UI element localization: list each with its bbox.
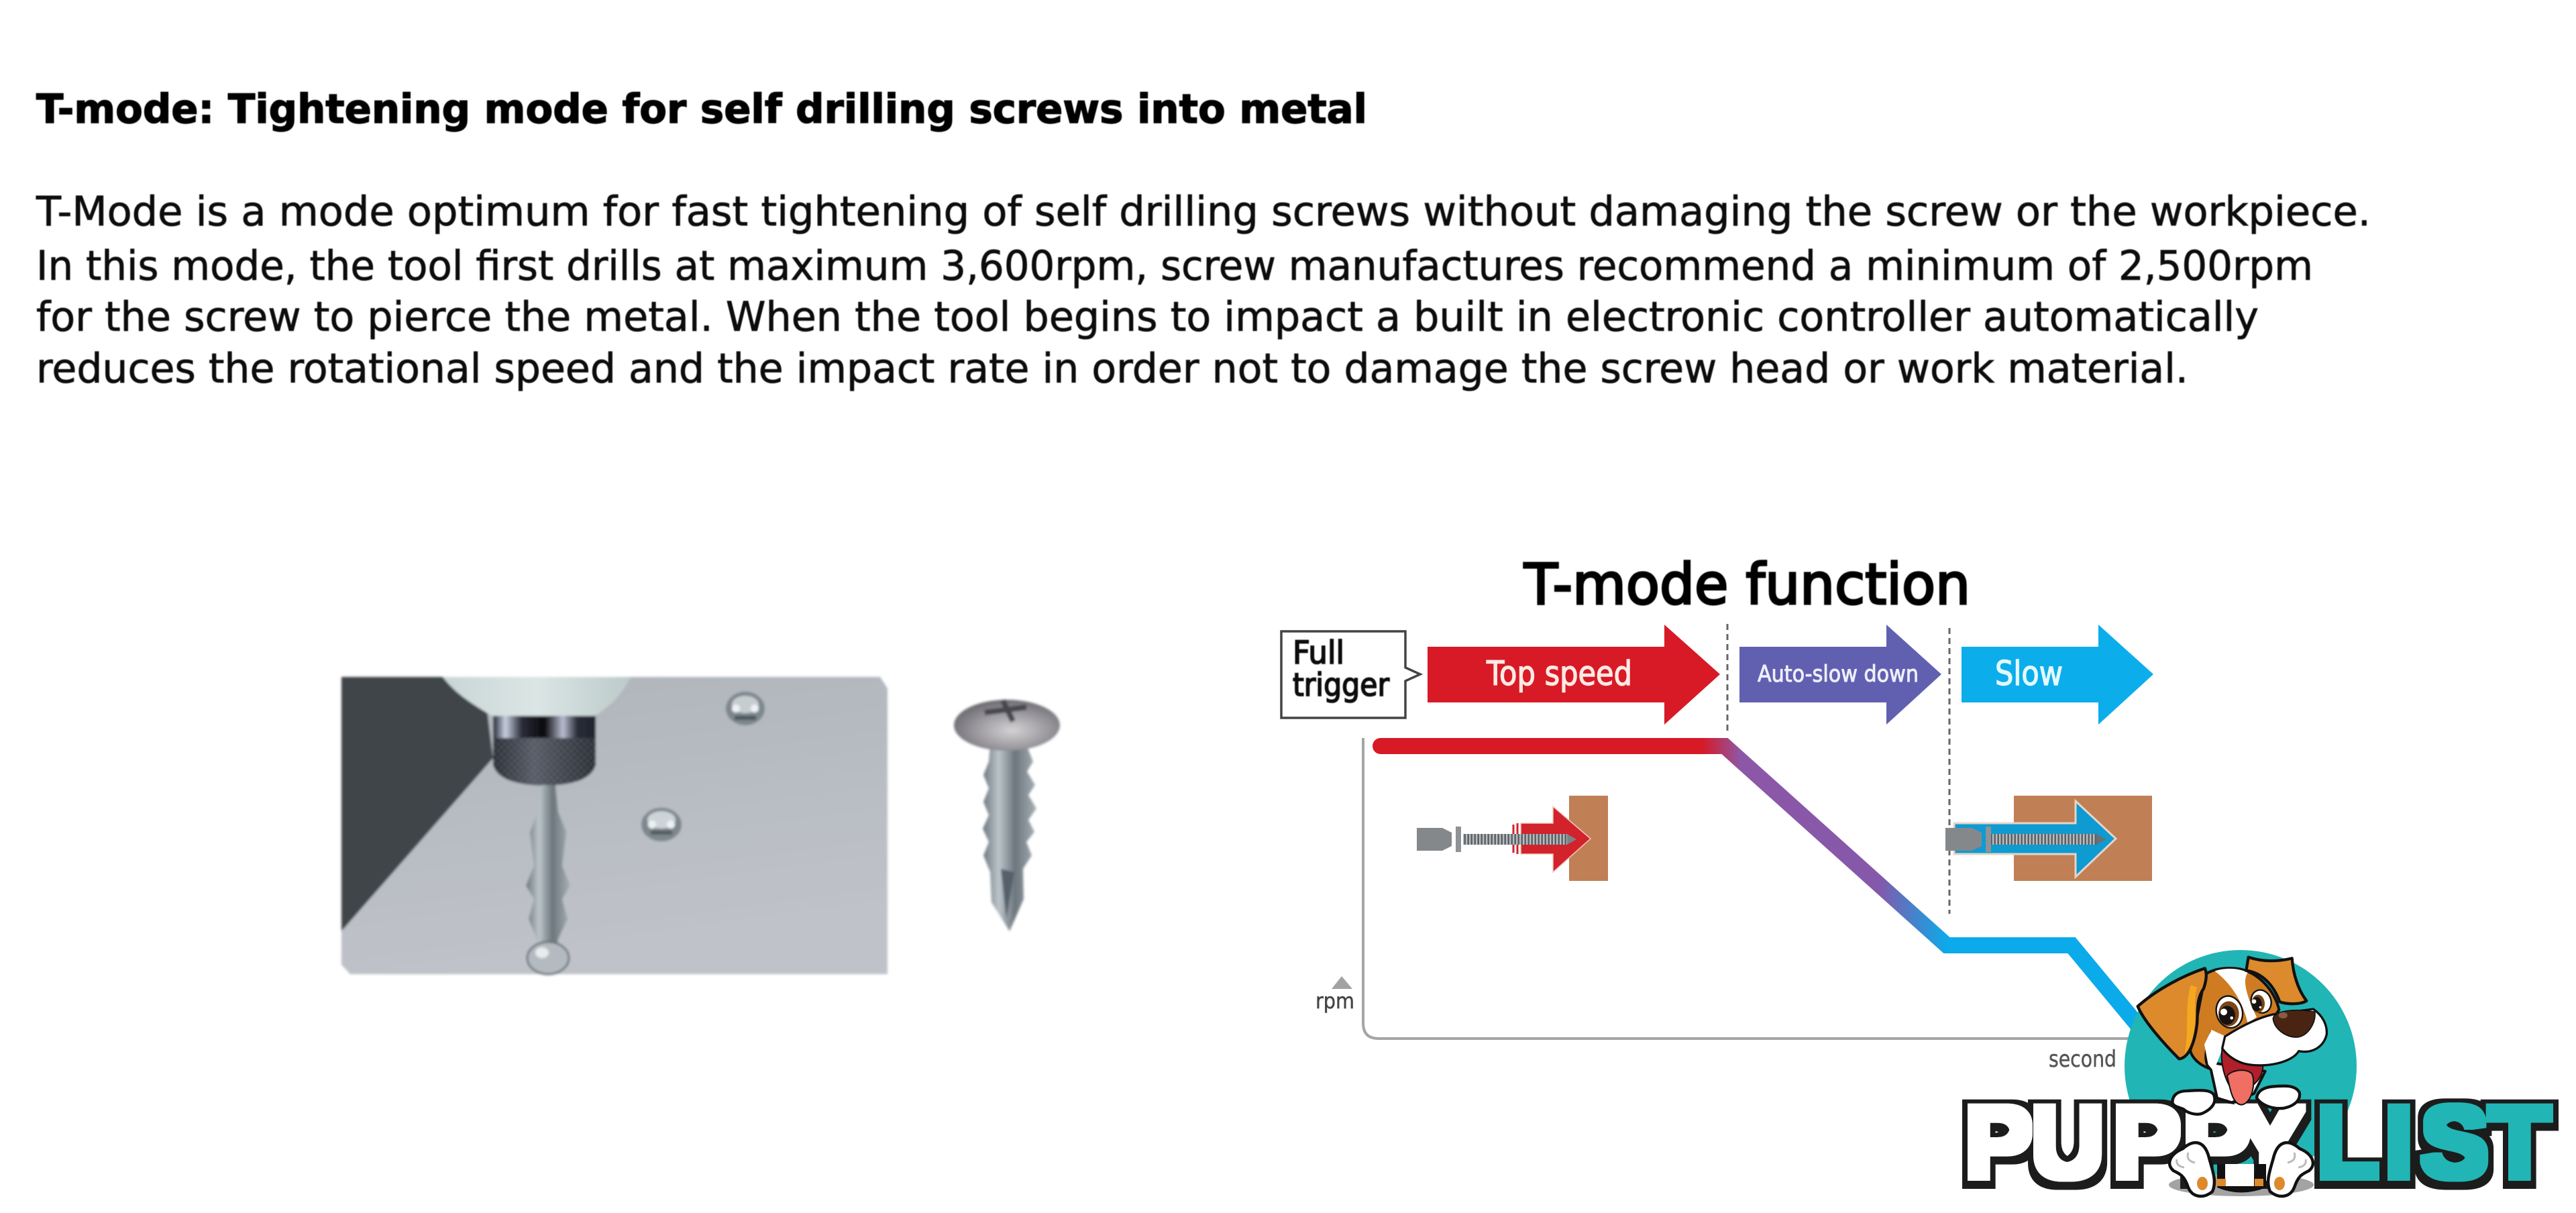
- full trigger callout: trigger: [1293, 667, 1390, 704]
- mouth: [2222, 1048, 2263, 1090]
- body text: for the screw to pierce the metal. When the tool begins to impact a built in electronic controller automatically: [36, 293, 2259, 341]
- logo wordmark: [1965, 1086, 2551, 1198]
- dog left hind leg: [2169, 1143, 2214, 1196]
- metal sheet: [341, 677, 888, 974]
- drill point flute: [1001, 869, 1014, 919]
- fastened screw middle: [641, 808, 682, 841]
- left ear: [2138, 968, 2206, 1059]
- arrow: slow: Slow: [1995, 654, 2063, 693]
- dashed phase dividers: [1727, 624, 1949, 914]
- dark background corner: [341, 677, 493, 931]
- left eye: [2212, 993, 2246, 1031]
- dog belly between hind legs: [2216, 1164, 2266, 1193]
- speed curve: [1381, 746, 2150, 1040]
- white blaze: [2215, 969, 2257, 1023]
- left front paw: [2172, 1090, 2214, 1114]
- logo teal circle: [2125, 950, 2357, 1182]
- nose: [2273, 1010, 2315, 1037]
- logo wordmark: LIST: [2317, 1086, 2551, 1198]
- logo wordmark: PUPPY: [1965, 1086, 2304, 1198]
- chart axes: [1363, 738, 2140, 1039]
- chart: T-mode function: [1281, 551, 2153, 1073]
- icon: screw at slow speed through thick material: [1945, 796, 2152, 881]
- screw shank and thread: [983, 745, 1036, 931]
- right ear: [2246, 957, 2306, 1004]
- arrow: auto-slow down: Auto-slow down: [1758, 661, 1919, 688]
- full trigger callout: Full: [1293, 635, 1344, 672]
- body text: In this mode, the tool first drills at maximum 3,600rpm, screw manufactures recommend a minimum of 2,500rpm: [36, 242, 2313, 290]
- fastened screw top: [726, 692, 765, 725]
- head: [2190, 968, 2279, 1069]
- knurled chuck: [493, 716, 596, 786]
- neck: [2209, 1062, 2265, 1102]
- title: T-mode: Tightening mode for self drilling screws into metal: [36, 86, 1367, 133]
- arrow: top speed: [1428, 625, 1720, 725]
- right front paw: [2257, 1086, 2300, 1108]
- right eye: [2248, 987, 2274, 1016]
- driver bit: [526, 785, 570, 949]
- ground shadow: [2169, 1173, 2314, 1196]
- photo: self drilling screw: [954, 700, 1060, 931]
- body text: reduces the rotational speed and the impact rate in order not to damage the screw head or work material.: [36, 345, 2188, 392]
- full trigger callout: [1281, 631, 1420, 718]
- snout: [2222, 1009, 2326, 1065]
- screw under bit: [527, 942, 569, 974]
- chest fur: [2204, 1030, 2226, 1071]
- chart title: T-mode function: [1523, 551, 1970, 617]
- x-axis label: second: second: [2049, 1046, 2116, 1073]
- dog mascot: [2138, 957, 2326, 1114]
- arrow: top speed: Top speed: [1486, 654, 1632, 693]
- arrow: slow: [1962, 625, 2153, 725]
- arrow: auto-slow down: [1739, 625, 1941, 725]
- y-axis label: rpm: [1316, 976, 1354, 1014]
- dog right hind leg: [2268, 1143, 2313, 1196]
- body text: T-Mode is a mode optimum for fast tightening of self drilling screws without damaging the screw or the workpiece.: [36, 188, 2371, 235]
- tongue: [2227, 1070, 2253, 1105]
- logo: PuppyList: [1965, 950, 2551, 1198]
- body text: [36, 188, 2371, 392]
- y-axis label: rpm: rpm: [1316, 988, 1354, 1014]
- drill nose cone: [443, 677, 631, 721]
- screw head: [954, 700, 1060, 751]
- photo: drill driving screw into metal sheet: [341, 677, 888, 974]
- icon: screw at top speed entering thin material: [1417, 796, 1608, 881]
- ear yellow edge: [2185, 985, 2197, 1053]
